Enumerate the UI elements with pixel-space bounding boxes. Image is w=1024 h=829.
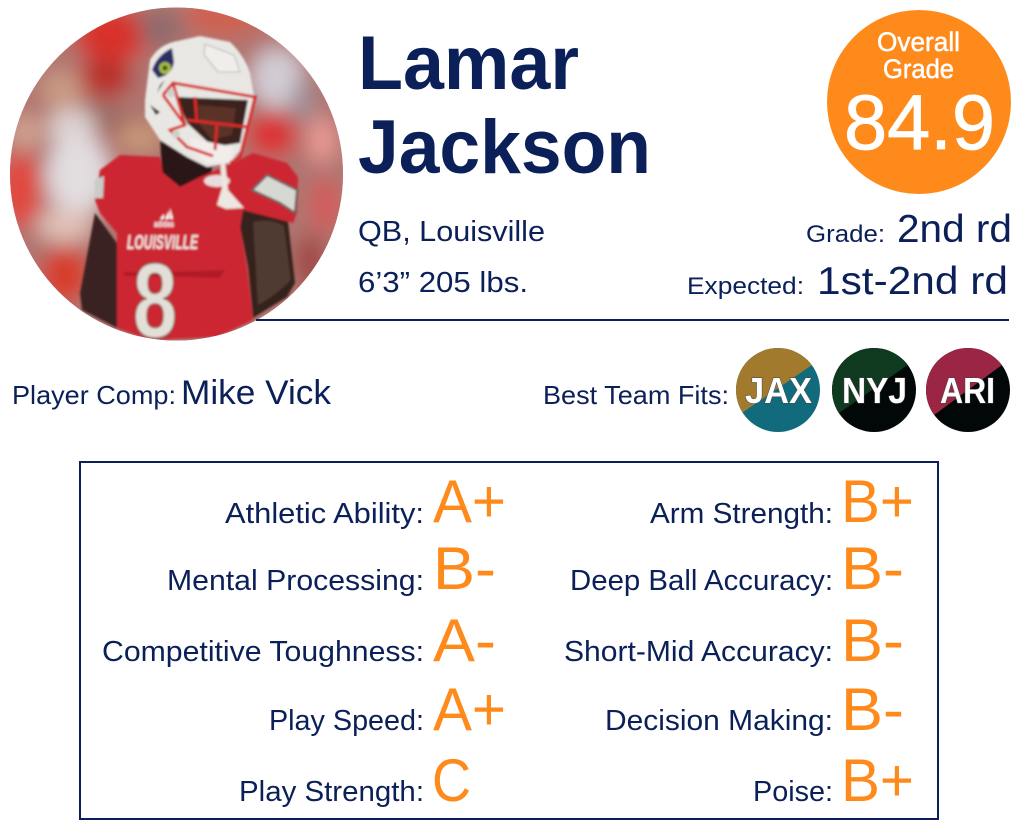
trait: deep ball accuracy: Deep Ball Accuracy: — [570, 565, 833, 597]
player photo: 8 — [133, 242, 177, 360]
team badge: NYJ: NYJ — [842, 370, 907, 411]
overall grade badge: 84.9 — [844, 78, 995, 166]
trait: arm strength — [650, 468, 914, 535]
overall grade badge: Grade — [883, 54, 954, 84]
overall grade badge: Overall — [877, 27, 960, 57]
trait: poise — [753, 747, 914, 814]
trait: play speed: Play Speed: — [269, 705, 424, 737]
height and weight: 6’3” 205 lbs. — [358, 267, 528, 299]
trait: decision making: Decision Making: — [605, 705, 833, 737]
neck — [160, 135, 215, 187]
expected draft round — [687, 260, 1008, 303]
trait: short-mid accuracy — [564, 607, 904, 674]
trait: play strength: Play Strength: — [239, 776, 424, 808]
trait: decision making — [605, 676, 904, 743]
shoulder stripe — [252, 175, 297, 213]
player comparison: Mike Vick — [181, 374, 332, 412]
trait: arm strength: Arm Strength: — [650, 498, 833, 530]
expected draft round: 1st-2nd rd — [817, 260, 1008, 303]
player name: Lamar — [358, 21, 579, 106]
team badge: JAX — [736, 348, 820, 432]
trait: deep ball accuracy: B- — [841, 535, 904, 602]
helmet — [145, 36, 254, 167]
overall grade badge — [827, 10, 1011, 194]
trait: play speed — [269, 676, 506, 743]
player photo: adidas — [154, 219, 174, 229]
trait: competitive toughness — [102, 607, 496, 674]
trait: athletic ability: A+ — [433, 468, 506, 535]
trait: mental processing — [167, 535, 496, 602]
chin guard — [192, 140, 231, 162]
expected draft round: Expected: — [687, 273, 804, 300]
jersey lettering: LOUISVILLE — [127, 232, 198, 254]
header divider — [256, 319, 1009, 321]
trait: athletic ability: Athletic Ability: — [225, 498, 424, 530]
team badge: ARI — [926, 348, 1010, 432]
trait: play strength: C — [432, 747, 471, 814]
position and school: QB, Louisville — [358, 216, 545, 248]
trait: short-mid accuracy: B- — [841, 607, 904, 674]
draft grade: Grade: — [806, 221, 885, 248]
face — [177, 97, 248, 147]
trait: competitive toughness: A- — [433, 607, 496, 674]
trait: mental processing: B- — [433, 535, 496, 602]
trait: competitive toughness: Competitive Toughness: — [102, 636, 424, 668]
trait: deep ball accuracy — [570, 535, 904, 602]
player comparison: Player Comp: — [12, 380, 176, 410]
draft grade: 2nd rd — [897, 208, 1012, 251]
team badge: JAX: JAX — [745, 370, 812, 411]
player photo — [10, 8, 343, 340]
trait: play strength — [239, 747, 471, 814]
trait: arm strength: B+ — [841, 468, 914, 535]
trait: play speed: A+ — [433, 676, 506, 743]
face mask — [163, 83, 255, 163]
best team fits label: Best Team Fits: — [543, 380, 729, 410]
trait: short-mid accuracy: Short-Mid Accuracy: — [564, 636, 833, 668]
panel: trait grades — [80, 462, 938, 819]
team badge: ARI: ARI — [940, 370, 995, 411]
team badge: NYJ — [832, 348, 916, 432]
chin strap — [217, 160, 244, 209]
player name: Jackson — [358, 105, 651, 190]
trait: athletic ability — [225, 468, 506, 535]
draft grade — [806, 208, 1012, 251]
trait: decision making: B- — [841, 676, 904, 743]
trait: poise: B+ — [841, 747, 914, 814]
trait: mental processing: Mental Processing: — [167, 565, 424, 597]
player comparison — [12, 374, 332, 412]
jersey — [95, 153, 298, 340]
arms — [80, 213, 122, 328]
trait: poise: Poise: — [753, 776, 833, 808]
player name — [358, 21, 651, 190]
